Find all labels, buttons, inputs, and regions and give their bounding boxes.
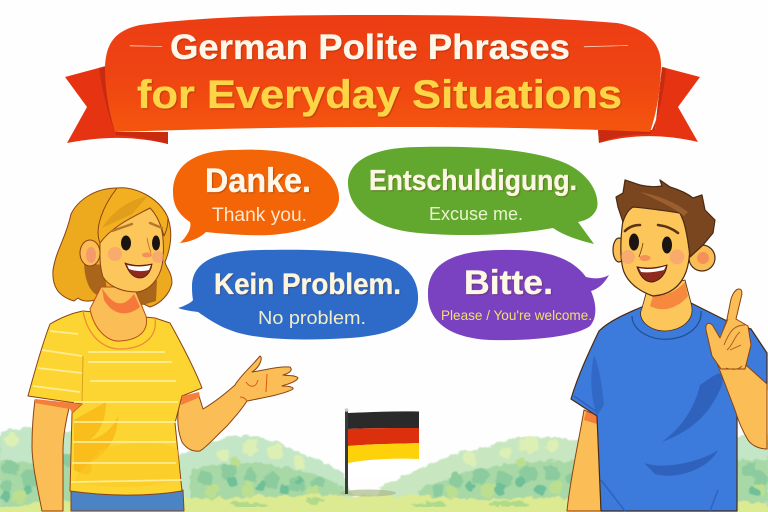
- speech bubble: Kein Problem: [178, 250, 418, 339]
- woman character: [28, 188, 298, 511]
- woman's yellow striped shirt: [28, 311, 202, 495]
- speech bubble: Danke: [173, 150, 339, 243]
- translation: Excuse me.: [429, 204, 523, 224]
- man's cheeks: [621, 250, 635, 264]
- woman's mouth: [125, 263, 152, 278]
- phrase: Danke.: [205, 162, 311, 200]
- woman's nose: [142, 238, 152, 258]
- woman's hair back: [53, 188, 172, 307]
- man's eyes: [629, 234, 639, 250]
- woman's eyes: [121, 236, 131, 250]
- woman's fringe: [98, 188, 168, 243]
- man's hair: [616, 180, 715, 257]
- man's mouth: [637, 265, 667, 282]
- man's collar: [632, 311, 701, 339]
- man's face: [621, 205, 690, 296]
- woman's neck: [90, 287, 147, 341]
- banner body: [105, 15, 661, 132]
- translation: Thank you.: [212, 205, 307, 226]
- woman's brows: [112, 223, 162, 231]
- man's pointing hand: [706, 289, 751, 369]
- man's ears: [613, 238, 715, 271]
- speech bubble: Entschuldigung: [348, 147, 598, 244]
- phrase: Entschuldigung.: [369, 165, 577, 197]
- woman's ear: [80, 240, 100, 266]
- man's left arm: [567, 410, 601, 511]
- left ribbon tail: [65, 66, 168, 144]
- translation: No problem.: [258, 308, 366, 328]
- phrase: Kein Problem.: [214, 268, 401, 301]
- translation: Please / You're welcome.: [441, 307, 592, 323]
- right ribbon tail: [598, 67, 700, 143]
- man character: [567, 180, 767, 511]
- speech bubble: Bitte: [428, 250, 609, 340]
- background foliage and grass: [0, 429, 768, 512]
- woman's collar: [83, 311, 155, 349]
- woman's cheeks: [108, 247, 122, 261]
- phrase: Bitte.: [464, 264, 553, 302]
- man's nose: [639, 243, 650, 261]
- title line 1: German Polite Phrases: [170, 28, 570, 67]
- title line 2: for Everyday Situations: [137, 73, 622, 117]
- woman's face: [100, 207, 163, 292]
- woman's far arm: [32, 400, 70, 511]
- man's blue shirt: [571, 301, 767, 511]
- German flag: [340, 408, 422, 496]
- woman's jeans: [71, 490, 184, 511]
- man's right arm: [717, 363, 767, 449]
- man's neck: [641, 280, 692, 331]
- man's brows: [625, 225, 678, 233]
- woman's gesturing arm and hand: [178, 356, 298, 451]
- title banner: [65, 15, 700, 144]
